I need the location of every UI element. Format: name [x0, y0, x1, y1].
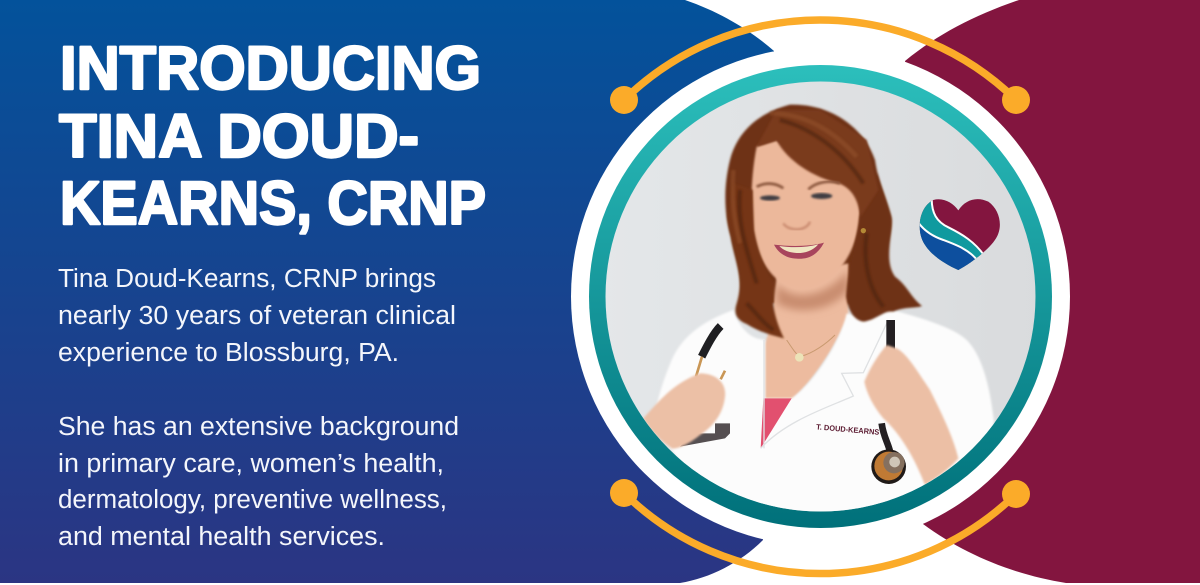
chin shadow — [777, 270, 848, 310]
title: INTRODUCING — [60, 34, 481, 102]
heart logo — [920, 199, 1000, 270]
eyes — [760, 193, 832, 201]
right hair lock — [846, 173, 922, 322]
photo backdrop — [600, 77, 1043, 517]
paragraph: background — [58, 413, 459, 551]
heart blue wave — [920, 224, 976, 270]
portrait photo illustration — [600, 77, 1043, 523]
paragraph: background: and mental health services. — [58, 523, 385, 551]
hair back — [725, 105, 892, 303]
earring — [861, 228, 866, 233]
paragraph: background: She has an extensive background — [58, 413, 459, 441]
stethoscope chest piece — [871, 449, 906, 484]
neck shadow area — [765, 263, 848, 400]
right hand and forearm — [864, 345, 958, 485]
paragraph: experience: Tina Doud-Kearns, CRNP brings — [58, 265, 436, 293]
heart maroon lobe — [920, 199, 1000, 270]
paragraph: experience — [58, 265, 456, 367]
paragraph: background: in primary care, women’s health, — [58, 450, 444, 478]
face — [751, 140, 860, 289]
coat lapel shading — [761, 320, 888, 448]
white lab coat — [653, 308, 994, 523]
pink shirt — [761, 398, 792, 448]
teeth — [779, 244, 818, 253]
smile — [774, 243, 824, 259]
title: KEARNS, CRNP — [60, 169, 486, 237]
left hair lock — [728, 183, 784, 338]
fringe — [757, 110, 878, 217]
eyebrows — [757, 182, 840, 189]
coat embroidery name: T. DOUD-KEARNS — [816, 422, 880, 437]
left hand — [643, 373, 725, 449]
title — [59, 34, 486, 237]
paragraph: background: dermatology, preventive wellness, — [58, 486, 447, 514]
teal ring — [589, 65, 1052, 528]
right stethoscope tube — [886, 320, 895, 350]
orange arc top — [610, 20, 1030, 114]
nose shadow — [783, 222, 810, 229]
panel: maroon right background — [905, 0, 1200, 583]
necklace — [787, 335, 835, 357]
paragraph: experience: experience to Blossburg, PA. — [58, 339, 399, 367]
heart teal wave — [920, 200, 982, 270]
panel: blue left background — [0, 0, 774, 583]
orange arc bottom — [610, 479, 1030, 574]
paragraph: experience: nearly 30 years of veteran clinical — [58, 302, 456, 330]
heart white dividers — [920, 200, 983, 259]
hair highlights — [733, 113, 857, 243]
left stethoscope tube and pen — [702, 326, 721, 357]
white circle behind portrait — [571, 47, 1070, 546]
title: TINA DOUD- — [59, 102, 419, 170]
hair strands — [739, 120, 883, 330]
coat logo patch — [680, 423, 730, 447]
